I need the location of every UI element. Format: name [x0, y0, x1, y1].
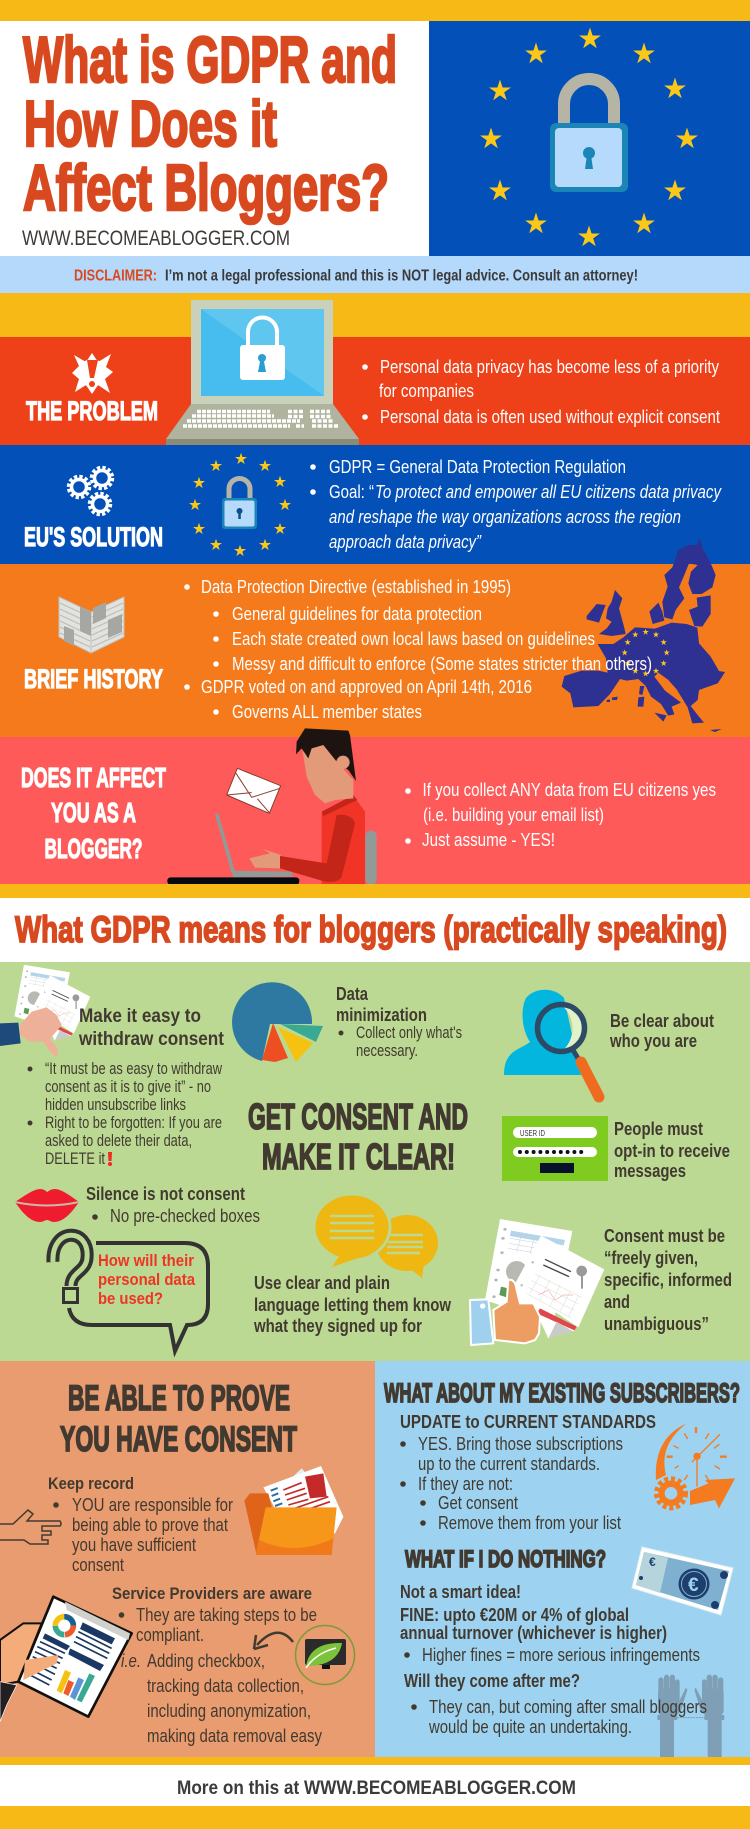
history bullets: General guidelines for data protection	[232, 603, 482, 624]
icon: raised cuffed hands	[657, 1675, 724, 1757]
text: data minimization	[336, 984, 462, 1060]
withdraw consent bullets: “It must be as easy to withdraw	[45, 1060, 222, 1078]
history bullets: Messy and difficult to enforce (Some states stricter than others)	[232, 653, 652, 674]
heading: get consent and make it clear	[248, 1096, 468, 1177]
text: consent must be freely given	[604, 1226, 732, 1334]
heading: does it affect you as a blogger: BLOGGER?	[44, 833, 142, 864]
text: service providers are aware	[112, 1584, 322, 1746]
text: update to current standards: UPDATE to CURRENT STANDARDS	[400, 1412, 656, 1432]
text: how will their personal data be used	[98, 1251, 195, 1308]
text: keep record: you have sufficient	[72, 1535, 196, 1555]
panel: disclaimer	[0, 256, 750, 293]
text: silence is not consent	[86, 1184, 260, 1226]
yellow band	[0, 293, 750, 337]
icon: person under magnifying glass	[504, 990, 599, 1097]
icon: padlock	[550, 79, 628, 192]
text: fine details: Not a smart idea!	[400, 1582, 521, 1602]
text: people must opt-in: People must	[614, 1119, 703, 1139]
text: people must opt-in: opt-in to receive	[614, 1141, 730, 1161]
text: will they come after me: Will they come after me?	[404, 1671, 580, 1691]
panel: title header	[0, 0, 750, 256]
icon: speech bubbles	[314, 1194, 438, 1278]
icon: newspaper	[59, 597, 124, 653]
withdraw consent bullets: asked to delete their data,	[45, 1132, 192, 1150]
title: How Does it	[24, 87, 277, 160]
solution bullets: approach data privacy”	[329, 531, 482, 552]
text: fine details: Higher fines = more serious infringements	[422, 1645, 700, 1665]
withdraw consent bullets: hidden unsubscribe links	[45, 1096, 186, 1114]
panel: does it affect you	[0, 728, 750, 885]
text: service providers are aware: making data removal easy	[147, 1726, 322, 1746]
affect bullets: Just assume - YES!	[422, 829, 555, 850]
affect bullets: (i.e. building your email list)	[423, 804, 604, 825]
text: service providers are aware: including anonymization,	[147, 1701, 311, 1721]
panel: EU flag with padlock	[429, 21, 750, 256]
text: consent must be freely given: Consent must be	[604, 1226, 725, 1246]
heading: get consent and make it clear: GET CONSENT AND	[248, 1096, 468, 1137]
solution bullets: Goal: “	[329, 481, 374, 502]
history bullets: Data Protection Directive (established in 1995)	[201, 576, 511, 597]
heading: make it easy to withdraw consent	[78, 1005, 224, 1050]
title	[23, 23, 397, 224]
icon: login form	[502, 1116, 608, 1181]
text: use clear and plain language	[253, 1273, 452, 1336]
panel: brief history	[0, 538, 750, 737]
heading: EU's solution: EU'S SOLUTION	[24, 522, 163, 552]
text: update to current standards: up to the current standards.	[418, 1454, 600, 1474]
text: will they come after me: would be quite an undertaking.	[428, 1717, 632, 1737]
icon: blogger at laptop with envelope	[167, 728, 377, 885]
solution bullets: GDPR = General Data Protection Regulation	[329, 456, 626, 477]
text: consent must be freely given: unambiguous”	[604, 1314, 709, 1334]
text: fine details: FINE: upto €20M or 4% of global	[400, 1605, 629, 1625]
problem bullets: for companies	[379, 380, 474, 401]
heading: get consent and make it clear: MAKE IT CLEAR!	[262, 1136, 455, 1177]
withdraw consent bullets: DELETE it	[45, 1150, 105, 1168]
icon: login form: USER ID	[520, 1129, 545, 1138]
title: What is GDPR and	[23, 23, 397, 96]
title: Affect Bloggers?	[23, 151, 389, 224]
text: use clear and plain language: language letting them know	[254, 1295, 452, 1315]
text: people must opt-in: messages	[614, 1161, 686, 1181]
affect bullets	[405, 779, 716, 850]
site url: WWW.BECOMEABLOGGER.COM	[22, 227, 290, 250]
footer text: More on this at WWW.BECOMEABLOGGER.COM	[177, 1777, 576, 1799]
history bullets: Each state created own local laws based on guidelines	[232, 628, 595, 649]
text: be clear about who you are	[609, 1011, 714, 1051]
heading: make it easy to withdraw consent: withdraw consent	[78, 1028, 224, 1050]
text: update to current standards	[400, 1412, 656, 1533]
solution bullets	[310, 456, 722, 552]
text: service providers are aware: i.e.	[121, 1651, 141, 1671]
icon: euro banknote	[632, 1547, 733, 1615]
icon: laptop with padlock	[166, 300, 359, 445]
text: people must opt-in	[614, 1119, 730, 1181]
heading: does it affect you as a blogger: YOU AS A	[51, 797, 136, 828]
text: service providers are aware: compliant.	[136, 1625, 204, 1645]
solution bullets: and reshape the way organizations across the region	[329, 506, 681, 527]
icon: documents with thumb up	[470, 1219, 604, 1345]
icon: zipped lips	[15, 1189, 79, 1222]
background top yellow band	[0, 0, 750, 30]
icon: euro banknote: €	[649, 1555, 656, 1569]
icon: ring of stars	[480, 28, 698, 246]
text: update to current standards: Remove them from your list	[438, 1513, 621, 1533]
text: be clear about who you are: who you are	[609, 1031, 697, 1051]
icon: map of Europe	[562, 538, 725, 732]
text: consent must be freely given: and	[604, 1292, 630, 1312]
text: how will their personal data be used: be used?	[98, 1289, 163, 1308]
text: service providers are aware: Service Providers are aware	[112, 1584, 312, 1603]
text: data minimization: Data	[336, 984, 369, 1004]
icon: clock gear and arrow	[656, 1423, 735, 1508]
text: data minimization: necessary.	[356, 1042, 418, 1060]
withdraw consent bullets: consent as it is to give it” - no	[45, 1078, 211, 1096]
withdraw consent bullets	[28, 1060, 222, 1168]
withdraw consent bullets: Right to be forgotten: If you are	[45, 1114, 222, 1132]
panel: be able to prove you have consent	[0, 1361, 375, 1757]
heading: what if I do nothing: WHAT IF I DO NOTHING?	[405, 1546, 606, 1573]
text: consent must be freely given: “freely given,	[604, 1248, 698, 1268]
heading: be able to prove: BE ABLE TO PROVE	[68, 1379, 290, 1418]
text: update to current standards: If they are not:	[418, 1474, 513, 1494]
text: how will their personal data be used: How will their	[98, 1251, 194, 1270]
chart: pie with pulled-out wedges	[232, 982, 323, 1062]
icon: hand holding tablet report	[0, 1597, 132, 1722]
icon: documents with thumb down	[0, 965, 90, 1057]
text: be clear about who you are: Be clear about	[610, 1011, 714, 1031]
text: keep record	[48, 1474, 233, 1575]
text: keep record: being able to prove that	[72, 1515, 228, 1535]
text: will they come after me	[404, 1671, 707, 1737]
text: data minimization: Collect only what's	[356, 1024, 462, 1042]
heading: be able to prove	[60, 1379, 297, 1459]
history bullets: Governs ALL member states	[232, 701, 422, 722]
heading: brief history: BRIEF HISTORY	[24, 664, 163, 694]
heading: be able to prove: YOU HAVE CONSENT	[60, 1420, 297, 1459]
panel: existing subscribers and what if I do nothing	[375, 1361, 750, 1757]
text: silence is not consent: No pre-checked boxes	[110, 1206, 260, 1226]
text: keep record: consent	[72, 1555, 124, 1575]
panel: footer	[0, 1757, 750, 1829]
text: data minimization: minimization	[336, 1005, 427, 1025]
icon: question mark speech bubble	[53, 1235, 208, 1351]
text: silence is not consent: Silence is not consent	[86, 1184, 245, 1204]
heading: does it affect you as a blogger	[21, 762, 166, 864]
icon: curved arrow	[254, 1633, 293, 1649]
icon: leaf on monitor in circle	[296, 1626, 354, 1684]
panel: section heading	[0, 898, 750, 962]
text: service providers are aware: tracking data collection,	[147, 1676, 304, 1696]
icon: euro banknote: €	[688, 1575, 699, 1596]
disclaimer label: DISCLAIMER:	[74, 268, 157, 284]
heading: the problem: THE PROBLEM	[26, 396, 158, 426]
history bullets	[184, 576, 652, 722]
text: keep record: YOU are responsible for	[72, 1495, 233, 1515]
icon: folder with papers	[244, 1466, 343, 1555]
text: use clear and plain language: what they signed up for	[253, 1316, 422, 1336]
text: fine details: annual turnover (whichever is higher)	[400, 1623, 667, 1643]
panel: EU's solution	[0, 445, 750, 564]
text: keep record: Keep record	[48, 1474, 134, 1493]
text: service providers are aware: They are taking steps to be	[136, 1605, 317, 1625]
text: update to current standards: Get consent	[438, 1493, 518, 1513]
heading: make it easy to withdraw consent: Make it easy to	[79, 1005, 201, 1027]
text: fine details	[400, 1582, 700, 1665]
icon: stars and padlock	[189, 453, 291, 556]
heading: does it affect you as a blogger: DOES IT AFFECT	[21, 762, 166, 793]
panel: get consent and make it clear	[0, 962, 750, 1361]
text: how will their personal data be used: personal data	[98, 1270, 195, 1289]
text: use clear and plain language: Use clear and plain	[254, 1273, 390, 1293]
icon: warning burst	[72, 353, 113, 394]
problem bullets	[362, 356, 720, 427]
disclaimer text: I’m not a legal professional and this is NOT legal advice. Consult an attorney!	[165, 268, 638, 284]
icon: pointing hand	[0, 1510, 61, 1544]
icon: gears	[68, 468, 112, 514]
text: service providers are aware: Adding checkbox,	[147, 1651, 265, 1671]
yellow band	[0, 884, 750, 898]
text: update to current standards: YES. Bring those subscriptions	[418, 1434, 623, 1454]
history bullets: GDPR voted on and approved on April 14th, 2016	[201, 676, 532, 697]
panel: the problem	[0, 300, 750, 445]
